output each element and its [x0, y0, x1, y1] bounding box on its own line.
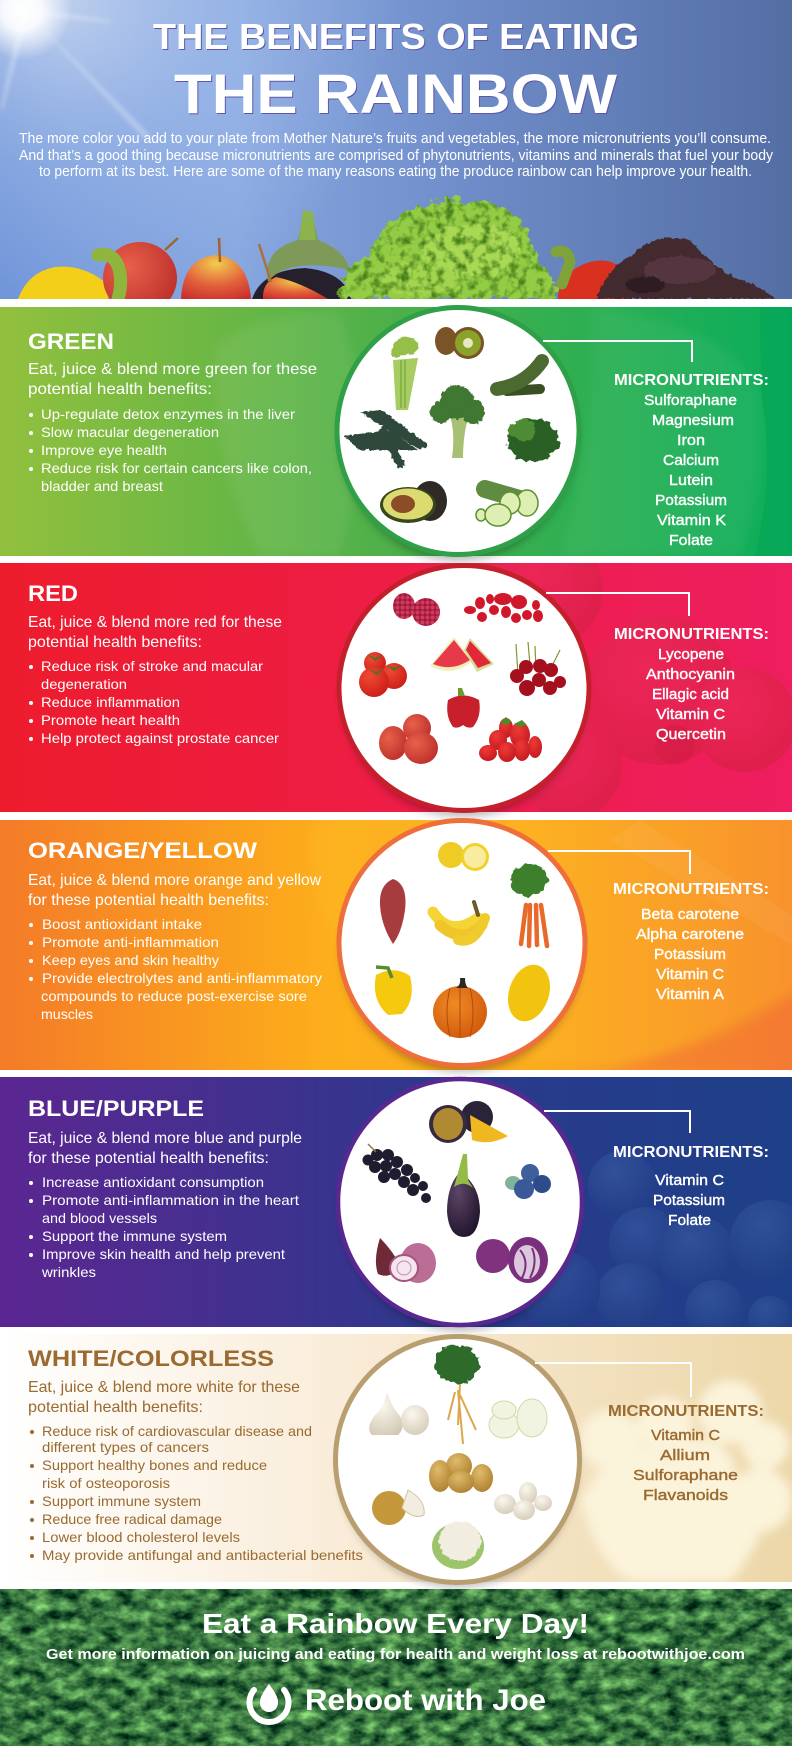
micronutrients: Calcium	[663, 452, 719, 469]
panel: red	[0, 563, 792, 820]
icon: lemon	[438, 842, 489, 871]
micronutrients	[614, 372, 769, 549]
title: THE BENEFITS OF EATING	[153, 16, 639, 57]
micronutrients	[613, 1144, 769, 1229]
heading and benefits: ORANGE/YELLOW	[28, 838, 257, 863]
icon: garlic	[369, 1392, 429, 1435]
icon: strawberries	[479, 717, 542, 762]
heading and benefits: for these potential health benefits:	[28, 1150, 269, 1167]
panel: white colorless	[0, 1334, 792, 1587]
benefits list: different types of cancers	[42, 1439, 209, 1455]
micronutrients	[608, 1403, 764, 1504]
panel: header	[0, 0, 792, 314]
connector line	[543, 341, 692, 362]
circle shadow	[343, 1088, 577, 1330]
heading and benefits: BLUE/PURPLE	[28, 1096, 204, 1121]
benefits list	[29, 406, 312, 494]
icon: parsley root	[435, 1344, 479, 1444]
micronutrients: Beta carotene	[641, 906, 739, 923]
icon: spinach	[507, 418, 559, 462]
heading and benefits	[28, 1346, 764, 1563]
green background	[0, 307, 792, 556]
icon: avocado	[380, 481, 447, 523]
icon: red bell pepper	[447, 688, 480, 728]
benefits list: Support healthy bones and reduce	[42, 1457, 267, 1473]
green lettuce	[338, 198, 556, 299]
micronutrients: Ellagic acid	[652, 686, 729, 703]
benefits list: Boost antioxidant intake	[42, 916, 202, 932]
icon: plum	[429, 1101, 508, 1143]
benefits list: Reduce risk of stroke and macular	[41, 658, 263, 674]
icon: broccoli	[430, 385, 485, 458]
food circle	[339, 566, 589, 810]
benefits list: Promote anti-inflammation in the heart	[42, 1192, 299, 1208]
micronutrients: Allium	[660, 1447, 710, 1464]
icon: raspberries	[393, 593, 440, 626]
purple background with blueberries	[0, 1077, 792, 1340]
icon: droplet ring	[250, 1684, 288, 1722]
micronutrients: Potassium	[654, 946, 726, 963]
benefits list: Reduce free radical damage	[42, 1511, 222, 1527]
heading and benefits: GREEN	[28, 329, 114, 354]
heading and benefits: for these potential health benefits:	[28, 892, 269, 909]
panel: blue purple	[0, 1077, 792, 1340]
icon: tomatoes	[359, 652, 407, 697]
icon: carrots	[510, 864, 548, 946]
food circle	[337, 308, 579, 554]
benefits list	[29, 658, 279, 746]
icon: blueberries	[505, 1164, 551, 1199]
micronutrients: Vitamin C	[655, 1172, 724, 1189]
heading and benefits	[28, 329, 317, 494]
cream background with cauliflower	[0, 1334, 792, 1582]
micronutrients: Vitamin A	[656, 986, 724, 1003]
heading and benefits	[28, 1096, 302, 1280]
benefits list: Reduce inflammation	[41, 694, 180, 710]
icon: grapes	[362, 1144, 431, 1203]
benefits list: May provide antifungal and antibacterial benefits	[42, 1547, 363, 1563]
micronutrients: Flavanoids	[643, 1487, 728, 1504]
icon: potatoes	[429, 1453, 493, 1493]
benefits list	[30, 1423, 363, 1563]
icon: cucumber	[476, 489, 538, 526]
benefits list: Increase antioxidant consumption	[42, 1174, 264, 1190]
title	[153, 16, 639, 125]
icon: celery	[391, 337, 418, 410]
connector line	[544, 1111, 690, 1133]
icon: yellow pepper	[375, 967, 412, 1015]
benefits list: risk of osteoporosis	[42, 1475, 170, 1491]
logo: Reboot with Joe: Reboot with Joe	[305, 1684, 546, 1717]
heading and benefits: potential health benefits:	[28, 1399, 203, 1416]
benefits list: degeneration	[41, 676, 127, 692]
benefits list: Support the immune system	[42, 1228, 227, 1244]
icon: celeriac	[372, 1490, 424, 1525]
heading and benefits: Eat, juice & blend more blue and purple	[28, 1130, 302, 1147]
icon: red cabbage	[476, 1237, 548, 1283]
micronutrients: Vitamin C	[656, 706, 725, 723]
logo: Reboot with Joe	[250, 1684, 546, 1722]
eggplant	[252, 210, 351, 299]
micronutrients: Quercetin	[656, 726, 726, 743]
icon: kiwi	[435, 327, 484, 359]
benefits list: Promote anti-inflammation	[42, 934, 219, 950]
intro text: to perform at its best. Here are some of the many reasons eating the produce rainbow can help improve your health.	[39, 164, 752, 180]
micronutrients: Folate	[668, 1212, 711, 1229]
food circle	[338, 1079, 582, 1325]
micronutrients: Folate	[669, 532, 713, 549]
icon: mushrooms	[494, 1482, 552, 1520]
benefits list: Slow macular degeneration	[41, 424, 219, 440]
heading and benefits	[28, 581, 282, 746]
closing headline: Eat a Rainbow Every Day!	[202, 1608, 589, 1639]
intro text: And that’s a good thing because micronutrients are comprised of phytonutrients, vitamins and minerals that fuel your body	[19, 148, 774, 164]
heading and benefits: RED	[28, 581, 78, 606]
micronutrients: Vitamin K	[657, 512, 726, 529]
heading and benefits: WHITE/COLORLESS	[28, 1346, 274, 1371]
green pepper stem	[98, 254, 121, 299]
icon: pumpkin	[433, 978, 487, 1038]
circle shadow	[340, 1345, 576, 1587]
micronutrients	[614, 626, 769, 743]
micronutrients: Iron	[677, 432, 705, 449]
apple	[181, 238, 251, 299]
micronutrients: Anthocyanin	[646, 666, 735, 683]
connector line	[548, 851, 690, 874]
icon: white onions	[489, 1399, 547, 1438]
benefits list: Support immune system	[42, 1493, 201, 1509]
benefits list: Reduce risk for certain cancers like colon,	[41, 460, 312, 476]
icon: zucchini	[497, 361, 542, 391]
icon: sweet potato	[380, 879, 406, 944]
icon: cauliflower	[432, 1521, 484, 1569]
icon: cherries	[510, 642, 566, 696]
foliage background	[0, 1589, 792, 1746]
micronutrients: Sulforaphane	[633, 1467, 738, 1484]
intro text	[19, 131, 774, 180]
icon: eggplant	[447, 1154, 480, 1237]
icon: spaghetti squash	[501, 959, 557, 1027]
micronutrients: MICRONUTRIENTS:	[613, 881, 769, 898]
benefits list: Promote heart health	[41, 712, 180, 728]
sky background	[0, 0, 792, 299]
dark lettuce	[596, 238, 775, 299]
intro text: The more color you add to your plate from Mother Nature’s fruits and vegetables, the more micronutrients you’ll consume.	[19, 131, 771, 147]
red background with raspberries	[0, 563, 792, 812]
heading and benefits: potential health benefits:	[28, 634, 202, 651]
heading and benefits: Eat, juice & blend more orange and yellow	[28, 872, 321, 889]
micronutrients: MICRONUTRIENTS:	[614, 372, 769, 389]
yellow pepper	[18, 267, 108, 299]
micronutrients: Magnesium	[652, 412, 734, 429]
circle shadow	[344, 574, 584, 816]
benefits list	[29, 1174, 299, 1280]
red apple	[103, 237, 179, 299]
micronutrients	[613, 881, 769, 1003]
micronutrients: Lutein	[669, 472, 713, 489]
food circle	[339, 820, 585, 1066]
benefits list: and blood vessels	[42, 1210, 157, 1226]
micronutrients: Vitamin C	[651, 1427, 720, 1444]
connector line	[546, 593, 689, 616]
connector line	[535, 1363, 691, 1397]
food circle	[336, 1336, 580, 1582]
pear	[259, 244, 328, 299]
icon: red apples	[379, 714, 438, 764]
benefits list: Up-regulate detox enzymes in the liver	[41, 406, 295, 422]
micronutrients: Lycopene	[658, 646, 724, 663]
icon: pomegranate seeds	[464, 593, 543, 623]
panel: orange yellow	[0, 818, 792, 1076]
benefits list	[29, 916, 322, 1022]
benefits list: Lower blood cholesterol levels	[42, 1529, 240, 1545]
icon: sun with rays	[0, 0, 150, 140]
produce row	[18, 195, 774, 299]
micronutrients: MICRONUTRIENTS:	[614, 626, 769, 643]
benefits list: Improve eye health	[41, 442, 167, 458]
micronutrients: Vitamin C	[656, 966, 724, 983]
benefits list: muscles	[41, 1006, 93, 1022]
micronutrients: Potassium	[653, 1192, 725, 1209]
heading and benefits: Eat, juice & blend more red for these	[28, 614, 282, 631]
icon: kale	[344, 410, 428, 468]
benefits list: Improve skin health and help prevent	[42, 1246, 285, 1262]
benefits list: compounds to reduce post-exercise sore	[41, 988, 307, 1004]
benefits list: Reduce risk of cardiovascular disease and	[42, 1423, 312, 1439]
benefits list: Help protect against prostate cancer	[41, 730, 279, 746]
micronutrients: Potassium	[655, 492, 727, 509]
circle shadow	[343, 829, 581, 1071]
website line: Get more information on juicing and eating for health and weight loss at rebootwithjoe.com	[46, 1647, 745, 1663]
benefits list: Keep eyes and skin healthy	[42, 952, 219, 968]
title: THE RAINBOW	[174, 62, 617, 125]
micronutrients: Sulforaphane	[644, 392, 737, 409]
benefits list: bladder and breast	[41, 478, 163, 494]
benefits list: Provide electrolytes and anti-inflammatory	[42, 970, 322, 986]
panel: footer	[0, 1589, 792, 1746]
micronutrients: MICRONUTRIENTS:	[608, 1403, 764, 1420]
micronutrients: Alpha carotene	[636, 926, 744, 943]
heading and benefits: Eat, juice & blend more green for these	[28, 361, 317, 378]
benefits list: wrinkles	[41, 1264, 96, 1280]
heading and benefits	[28, 838, 322, 1022]
heading and benefits: potential health benefits:	[28, 381, 212, 398]
heading and benefits: Eat, juice & blend more white for these	[28, 1379, 300, 1396]
panel: green	[0, 307, 792, 560]
icon: red onion	[376, 1238, 436, 1283]
red pepper	[556, 251, 626, 299]
icon: watermelon	[430, 637, 494, 672]
circle shadow	[341, 316, 575, 560]
micronutrients: MICRONUTRIENTS:	[613, 1144, 769, 1161]
orange background with citrus slice	[0, 820, 792, 1070]
icon: bananas	[433, 902, 485, 941]
